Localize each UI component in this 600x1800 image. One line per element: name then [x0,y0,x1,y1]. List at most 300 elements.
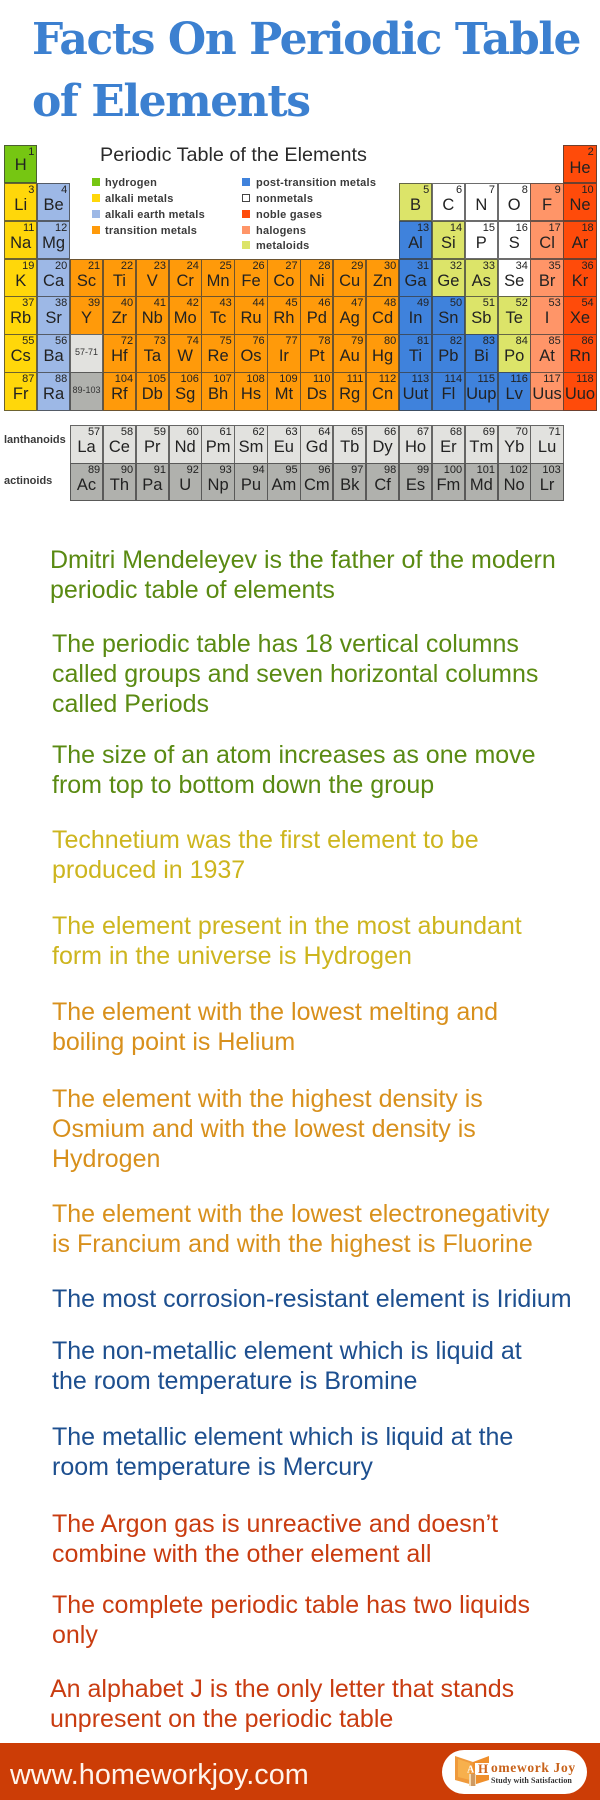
element cells main table: Sr [45,309,62,327]
fact: Mercury [52,1423,513,1481]
lanthanoids and actinoids rows: 100 [444,464,462,476]
fact: electronegativity: The element with the lowest electronegativity [52,1200,549,1228]
fact: electronegativity: is Francium and with the highest is Fluorine [52,1230,533,1258]
element cells main table: 56 [55,335,67,347]
element cells main table: 35 [549,260,561,272]
element cells main table: 85 [549,335,561,347]
lanthanoids and actinoids rows: Gd [306,438,328,456]
element cells main table: 2 [588,146,594,158]
element cells main table: H [15,156,27,174]
element cells main table: Cu [339,272,360,290]
element cells main table: 53 [549,297,561,309]
element cells main table: 42 [187,297,199,309]
lanthanoids and actinoids rows: 62 [252,426,265,438]
lanthanoids and actinoids rows: Tm [469,438,493,456]
element cells main table: 23 [154,260,166,272]
element cells main table: 36 [581,260,594,272]
element cells main table: Y [81,309,92,327]
element cells main table: 80 [384,335,396,347]
fact: Iridium: The most corrosion-resistant element is Iridium [52,1285,572,1313]
lanthanoids and actinoids rows: Er [440,438,457,456]
element cells main table: Sg [175,385,195,403]
legend: halogens [256,225,306,237]
fact: density: The element with the highest density is [52,1085,483,1113]
element cells main table: 37 [22,297,34,309]
element cells main table: 4 [61,184,67,196]
element cells main table: Rh [273,309,294,327]
fact: letter J [50,1675,514,1733]
element cells main table: Kr [572,272,588,290]
element cells main table: I [545,309,549,327]
element cells main table: 111 [347,373,363,385]
element cells main table: 113 [412,373,429,385]
legend [92,177,376,252]
element cells main table: Zr [112,309,127,327]
fact: Hydrogen abundance: The element present in the most abundant [52,912,522,940]
element cells main table: 108 [246,373,265,385]
element cells main table: 8 [522,184,528,196]
element cells main table: Sb [471,309,491,327]
lanthanoids and actinoids rows: U [179,476,191,494]
element cells main table: Zn [373,272,392,290]
element cells main table: Hf [111,347,128,365]
lanthanoids and actinoids rows: Sm [239,438,263,456]
element cells main table: Uup [466,385,496,403]
lanthanoids and actinoids rows: Pa [142,476,162,494]
lanthanoids and actinoids rows: Pr [144,438,161,456]
element cells main table: 18 [581,222,594,234]
element cells main table: 115 [477,373,495,385]
element cells main table: 5 [423,184,429,196]
element cells main table: 13 [417,222,429,234]
element cells main table: 87 [22,373,34,385]
lanthanoids and actinoids rows: 90 [121,464,133,476]
element cells main table: S [509,234,520,252]
element cells main table: Bh [208,385,228,403]
element cells main table: 76 [252,335,265,347]
fact: Mercury: The metallic element which is liquid at the [52,1423,513,1451]
element cells main table: 30 [384,260,396,272]
logo pill [442,1750,587,1794]
fact: two liquids: The complete periodic table has two liquids [52,1591,530,1619]
element cells main table: Hs [241,385,261,403]
element cells main table: 24 [187,260,199,272]
element cells main table: Si [441,234,456,252]
element cells main table: 81 [417,335,429,347]
element cells main table: 78 [318,335,330,347]
fact: Technetium [52,826,479,884]
logo name: omework Joy [491,1760,576,1775]
element cells main table: 83 [483,335,495,347]
element cells main table: 79 [351,335,363,347]
lanthanoids and actinoids rows: Pm [206,438,230,456]
element cells main table: 74 [187,335,199,347]
lanthanoids and actinoids rows: 64 [318,426,330,438]
lanthanoids and actinoids rows: 58 [121,426,133,438]
element cells main table: Pd [307,309,327,327]
lanthanoids and actinoids rows: 70 [516,426,528,438]
element cells main table: 72 [121,335,133,347]
lanthanoids and actinoids rows: Yb [504,438,524,456]
element cells main table: Mt [275,385,293,403]
element cells main table: Ti [409,347,422,365]
element cells main table: Ni [309,272,325,290]
element cells main table: Ir [279,347,289,365]
element cells main table: Li [14,196,27,214]
element cells main table: Tc [210,309,226,327]
element cells main table: 14 [450,222,462,234]
fact: Technetium: Technetium was the first element to be [52,826,479,854]
legend: metaloids [256,240,310,252]
element cells main table: 45 [285,297,298,309]
element cells main table: 112 [379,373,396,385]
lanthanoids and actinoids rows: 98 [384,464,396,476]
element cells main table: 117 [543,373,561,385]
legend: post-transition metals [256,177,376,189]
lanthanoids and actinoids rows: 57 [88,426,100,438]
element cells main table: Ti [113,272,126,290]
element cells main table: 44 [252,297,265,309]
element cells main table: 32 [450,260,462,272]
logo tagline: Study with Satisfaction [491,1776,572,1785]
lanthanoids and actinoids rows: 61 [220,426,232,438]
element cells main table: 109 [279,373,298,385]
element cells main table: 105 [148,373,166,385]
element cells main table: Xe [570,309,590,327]
element cells main table: Pt [309,347,325,365]
element cells main table: 89-103 [72,385,100,395]
icon: open book logo [455,1756,489,1786]
element cells main table: 33 [483,260,495,272]
fact: density [52,1085,483,1173]
lanthanoids and actinoids rows: Ce [109,438,130,456]
lanthanoids and actinoids rows: 99 [417,464,429,476]
element cells main table: 55 [22,335,34,347]
lanthanoids and actinoids rows: 60 [187,426,199,438]
element cells main table: F [542,196,552,214]
element cells main table: 73 [154,335,166,347]
element cells main table: In [409,309,422,327]
element cells main table: Ta [144,347,161,365]
element cells main table: Fr [13,385,28,403]
element cells main table: 21 [88,260,100,272]
element cells main table: 107 [213,373,232,385]
lanthanoids and actinoids rows: Pu [241,476,261,494]
element cells main table: Fl [442,385,455,403]
element cells main table: Cd [372,309,393,327]
element cells main table: 11 [23,222,34,234]
element cells main table: 54 [581,297,594,309]
element cells main table: Cn [372,385,393,403]
element cells main table: 20 [55,260,67,272]
fact: Helium: The element with the lowest melting and [52,998,498,1026]
element cells main table: 31 [417,260,429,272]
element cells main table: 38 [55,297,67,309]
lanthanoids and actinoids rows: Np [208,476,229,494]
lanthanoids and actinoids rows [4,425,564,501]
lanthanoids and actinoids rows: 69 [483,426,495,438]
element cells main table: Ag [340,309,360,327]
element cells main table: Be [43,196,64,214]
element cells main table: 40 [121,297,133,309]
element cells main table: 49 [417,297,429,309]
element cells main table: 7 [489,184,495,196]
fact: groups and periods: The periodic table has 18 vertical columns [52,630,519,658]
fact: Mendeleyev: periodic table of elements [50,576,335,604]
element cells main table: V [147,272,158,290]
element cells main table: Rb [10,309,31,327]
lanthanoids and actinoids rows: 96 [318,464,330,476]
element cells main table: 114 [445,373,462,385]
lanthanoids and actinoids rows: Am [272,476,296,494]
fact: Hydrogen abundance [52,912,522,970]
lanthanoids and actinoids rows: actinoids [4,475,52,487]
element cells main table: Fe [241,272,261,290]
element cells main table: B [410,196,421,214]
fact: Mendeleyev: Dmitri Mendeleyev is the father of the modern [50,546,556,574]
element cells main table: Ar [572,234,588,252]
fact: atom size [52,741,536,799]
element cells main table: 34 [516,260,528,272]
lanthanoids and actinoids rows: Th [110,476,129,494]
lanthanoids and actinoids rows: No [504,476,525,494]
element cells main table: 50 [450,297,462,309]
table heading: Periodic Table of the Elements [100,144,367,166]
element cells main table: K [15,272,26,290]
element cells main table: Mg [42,234,65,252]
element cells main table: 75 [220,335,232,347]
element cells main table: 1 [28,146,34,158]
element cells main table: Cr [176,272,194,290]
element cells main table: 43 [220,297,232,309]
element cells main table: 77 [285,335,298,347]
element cells main table: C [442,196,454,214]
fact: density: Osmium and with the lowest density is [52,1115,476,1143]
element cells main table: 48 [384,297,396,309]
element cells main table: Po [504,347,524,365]
lanthanoids and actinoids rows: Nd [175,438,196,456]
fact: atom size: The size of an atom increases as one move [52,741,536,769]
element cells main table: 82 [450,335,462,347]
element cells main table: Ba [43,347,64,365]
fact: Helium [52,998,498,1056]
lanthanoids and actinoids rows: 101 [477,464,495,476]
element cells main table: 39 [88,297,100,309]
periodic table image panel [4,144,597,501]
lanthanoids and actinoids rows: 95 [285,464,298,476]
element cells main table: Hg [372,347,393,365]
title: of Elements [32,76,310,127]
element cells main table: Ne [569,196,591,214]
element cells main table: P [476,234,487,252]
element cells main table: Ra [43,385,64,403]
element cells main table: 51 [483,297,495,309]
element cells main table: Ds [307,385,327,403]
lanthanoids and actinoids rows: 93 [220,464,232,476]
fact: Technetium: produced in 1937 [52,856,245,884]
element cells main table: 12 [55,222,67,234]
lanthanoids and actinoids rows: 68 [450,426,462,438]
lanthanoids and actinoids rows: 91 [154,464,166,476]
element cells main table: 22 [121,260,133,272]
element cells main table: N [475,196,487,214]
element cells main table: O [508,196,521,214]
fact: electronegativity [52,1200,550,1258]
element cells main table: Uus [532,385,562,403]
lanthanoids and actinoids rows: Fm [436,476,460,494]
lanthanoids and actinoids rows: Cm [304,476,330,494]
legend: transition metals [105,225,197,237]
element cells main table: 41 [154,297,166,309]
element cells main table: 27 [285,260,298,272]
element cells main table: 17 [549,222,561,234]
icon: open book logo: H [478,1761,488,1776]
fact: density: Hydrogen [52,1145,160,1173]
element cells main table: Lv [505,385,523,403]
element cells main table: Uut [403,385,428,403]
element cells main table: Sn [438,309,458,327]
lanthanoids and actinoids rows: Lr [540,476,554,494]
lanthanoids and actinoids rows: 66 [384,426,396,438]
fact: groups and periods: called groups and seven horizontal columns [52,660,538,688]
lanthanoids and actinoids rows: Dy [372,438,393,456]
fact: Argon: combine with the other element all [52,1540,431,1568]
element cells main table: 15 [483,222,495,234]
element cells main table: 9 [555,184,561,196]
element cells main table: 52 [516,297,528,309]
legend: noble gases [256,209,322,221]
element cells main table: At [539,347,555,365]
element cells main table: Se [504,272,524,290]
element cells main table: Cs [11,347,31,365]
fact: Argon [52,1510,498,1568]
fact: Mendeleyev [50,546,556,604]
fact: atom size: from top to bottom down the group [52,771,434,799]
fact: Helium: boiling point is Helium [52,1028,295,1056]
element cells main table: Ru [240,309,262,327]
element cells main table: 57-71 [75,347,98,357]
element cells main table: Os [240,347,262,365]
element cells main table: As [472,272,491,290]
element cells main table: Pb [438,347,458,365]
element cells main table: 10 [581,184,594,196]
lanthanoids and actinoids rows: 63 [285,426,298,438]
element cells main table: Sc [77,272,96,290]
fact: Hydrogen abundance: form in the universe is Hydrogen [52,942,412,970]
lanthanoids and actinoids rows: lanthanoids [4,434,66,446]
element cells main table: Cl [539,234,555,252]
element cells main table: 118 [576,373,594,385]
lanthanoids and actinoids rows: 59 [154,426,166,438]
footer bar [0,1743,600,1800]
fact: letter J: An alphabet J is the only letter that stands [50,1675,514,1703]
element cells main table: 84 [516,335,528,347]
element cells main table: Au [340,347,360,365]
fact: two liquids [52,1591,530,1649]
element cells main table: 106 [181,373,199,385]
lanthanoids and actinoids rows: La [77,438,96,456]
title: Facts On Periodic Table [32,14,580,65]
element cells main table: 46 [318,297,330,309]
lanthanoids and actinoids rows: 65 [351,426,363,438]
lanthanoids and actinoids rows: Es [406,476,425,494]
element cells main table: 19 [22,260,34,272]
lanthanoids and actinoids rows: Eu [274,438,294,456]
element cells main table: Mn [207,272,230,290]
element cells main table: Ca [43,272,64,290]
element cells main table: 29 [351,260,363,272]
element cells main table: 6 [456,184,462,196]
fact: groups and periods: called Periods [52,690,209,718]
lanthanoids and actinoids rows: 97 [351,464,363,476]
fact: Bromine [52,1337,522,1395]
element cells main table: Re [208,347,229,365]
element cells main table: He [569,159,591,177]
icon: open book logo: A [467,1764,475,1776]
fact: Argon: The Argon gas is unreactive and doesn’t [52,1510,498,1538]
element cells main table: 104 [115,373,133,385]
lanthanoids and actinoids rows: Ac [77,476,96,494]
element cells main table: 86 [581,335,594,347]
lanthanoids and actinoids rows: Lu [538,438,556,456]
element cells main table: Rg [339,385,360,403]
element cells main table: 47 [351,297,363,309]
element cells main table: W [177,347,193,365]
legend: alkali metals [105,193,174,205]
element cells main table [4,145,597,411]
title [32,14,580,127]
lanthanoids and actinoids rows: 67 [417,426,429,438]
fact: groups and periods [52,630,538,718]
element cells main table: Rf [111,385,128,403]
lanthanoids and actinoids rows: Md [470,476,493,494]
fact: Bromine: The non-metallic element which is liquid at [52,1337,522,1365]
website url: www.homeworkjoy.com [10,1759,309,1791]
element cells main table: Rn [569,347,591,365]
lanthanoids and actinoids rows: Bk [340,476,359,494]
element cells main table: 116 [510,373,528,385]
legend: hydrogen [105,177,157,189]
element cells main table: Co [273,272,294,290]
fact: two liquids: only [52,1621,98,1649]
element cells main table: Mo [174,309,197,327]
lanthanoids and actinoids rows: Cf [374,476,391,494]
element cells main table: 26 [252,260,265,272]
lanthanoids and actinoids rows: 103 [542,464,561,476]
lanthanoids and actinoids rows: Ho [405,438,426,456]
lanthanoids and actinoids rows: 102 [510,464,528,476]
fact: Bromine: the room temperature is Bromine [52,1367,417,1395]
element cells main table: Al [408,234,423,252]
element cells main table: 25 [220,260,232,272]
element cells main table: 110 [313,373,330,385]
element cells main table: 88 [55,373,67,385]
fact: Mercury: room temperature is Mercury [52,1453,373,1481]
legend: alkali earth metals [105,209,205,221]
element cells main table: Bi [474,347,489,365]
lanthanoids and actinoids rows: 71 [549,426,561,438]
lanthanoids and actinoids rows: 92 [187,464,199,476]
lanthanoids and actinoids rows: 89 [88,464,100,476]
element cells main table: Ga [404,272,426,290]
element cells main table: Te [505,309,523,327]
element cells main table: Db [142,385,163,403]
lanthanoids and actinoids rows: 94 [252,464,265,476]
element cells main table: Br [539,272,555,290]
element cells main table: 3 [28,184,34,196]
element cells main table: Nb [142,309,163,327]
lanthanoids and actinoids rows: Tb [340,438,359,456]
